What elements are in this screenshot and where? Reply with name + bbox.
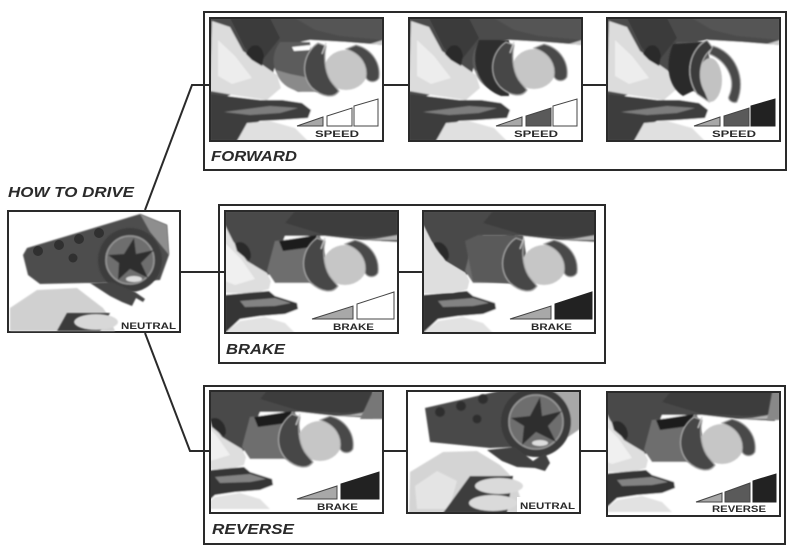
step: forward 2 xyxy=(409,18,582,141)
icon: controller buttons xyxy=(33,228,104,262)
icon: trigger xyxy=(90,282,145,306)
panel: neutral main xyxy=(8,211,180,332)
panel: forward xyxy=(204,12,786,170)
icon: controller shoulder xyxy=(140,214,169,255)
connector: to brake xyxy=(181,271,225,273)
connector: to forward xyxy=(145,85,210,210)
step: reverse 2 neutral xyxy=(407,387,580,513)
panel: brake xyxy=(219,205,605,363)
step: reverse 2 neutral: NEUTRAL xyxy=(520,501,575,512)
step: brake 1: BRAKE xyxy=(333,322,374,333)
step: forward 1 xyxy=(210,18,383,141)
step: reverse 3 xyxy=(602,390,780,516)
heading: brake: BRAKE xyxy=(226,341,286,358)
step: reverse 3: REVERSE xyxy=(712,504,766,515)
panel: reverse xyxy=(200,386,785,544)
icon: controller body xyxy=(23,214,169,284)
step: reverse 1: BRAKE xyxy=(317,502,358,513)
step: reverse 1 xyxy=(200,387,383,513)
label: neutral: NEUTRAL xyxy=(121,321,176,332)
heading: reverse: REVERSE xyxy=(212,521,295,538)
connector: to reverse xyxy=(145,333,210,451)
step: forward 3 xyxy=(607,18,780,141)
step: brake 1 xyxy=(225,211,398,333)
step: brake 2 xyxy=(423,211,596,333)
icon: hand xyxy=(10,288,115,331)
icon: finger xyxy=(74,314,118,330)
step: brake 2: BRAKE xyxy=(531,322,572,333)
step: forward 3: SPEED xyxy=(712,129,756,140)
icon: hand grip xyxy=(57,313,110,331)
icon: steering wheel xyxy=(98,228,162,292)
heading: how to drive: HOW TO DRIVE xyxy=(8,184,135,201)
heading: forward: FORWARD xyxy=(211,148,297,165)
step: forward 2: SPEED xyxy=(514,129,558,140)
step: forward 1: SPEED xyxy=(315,129,359,140)
